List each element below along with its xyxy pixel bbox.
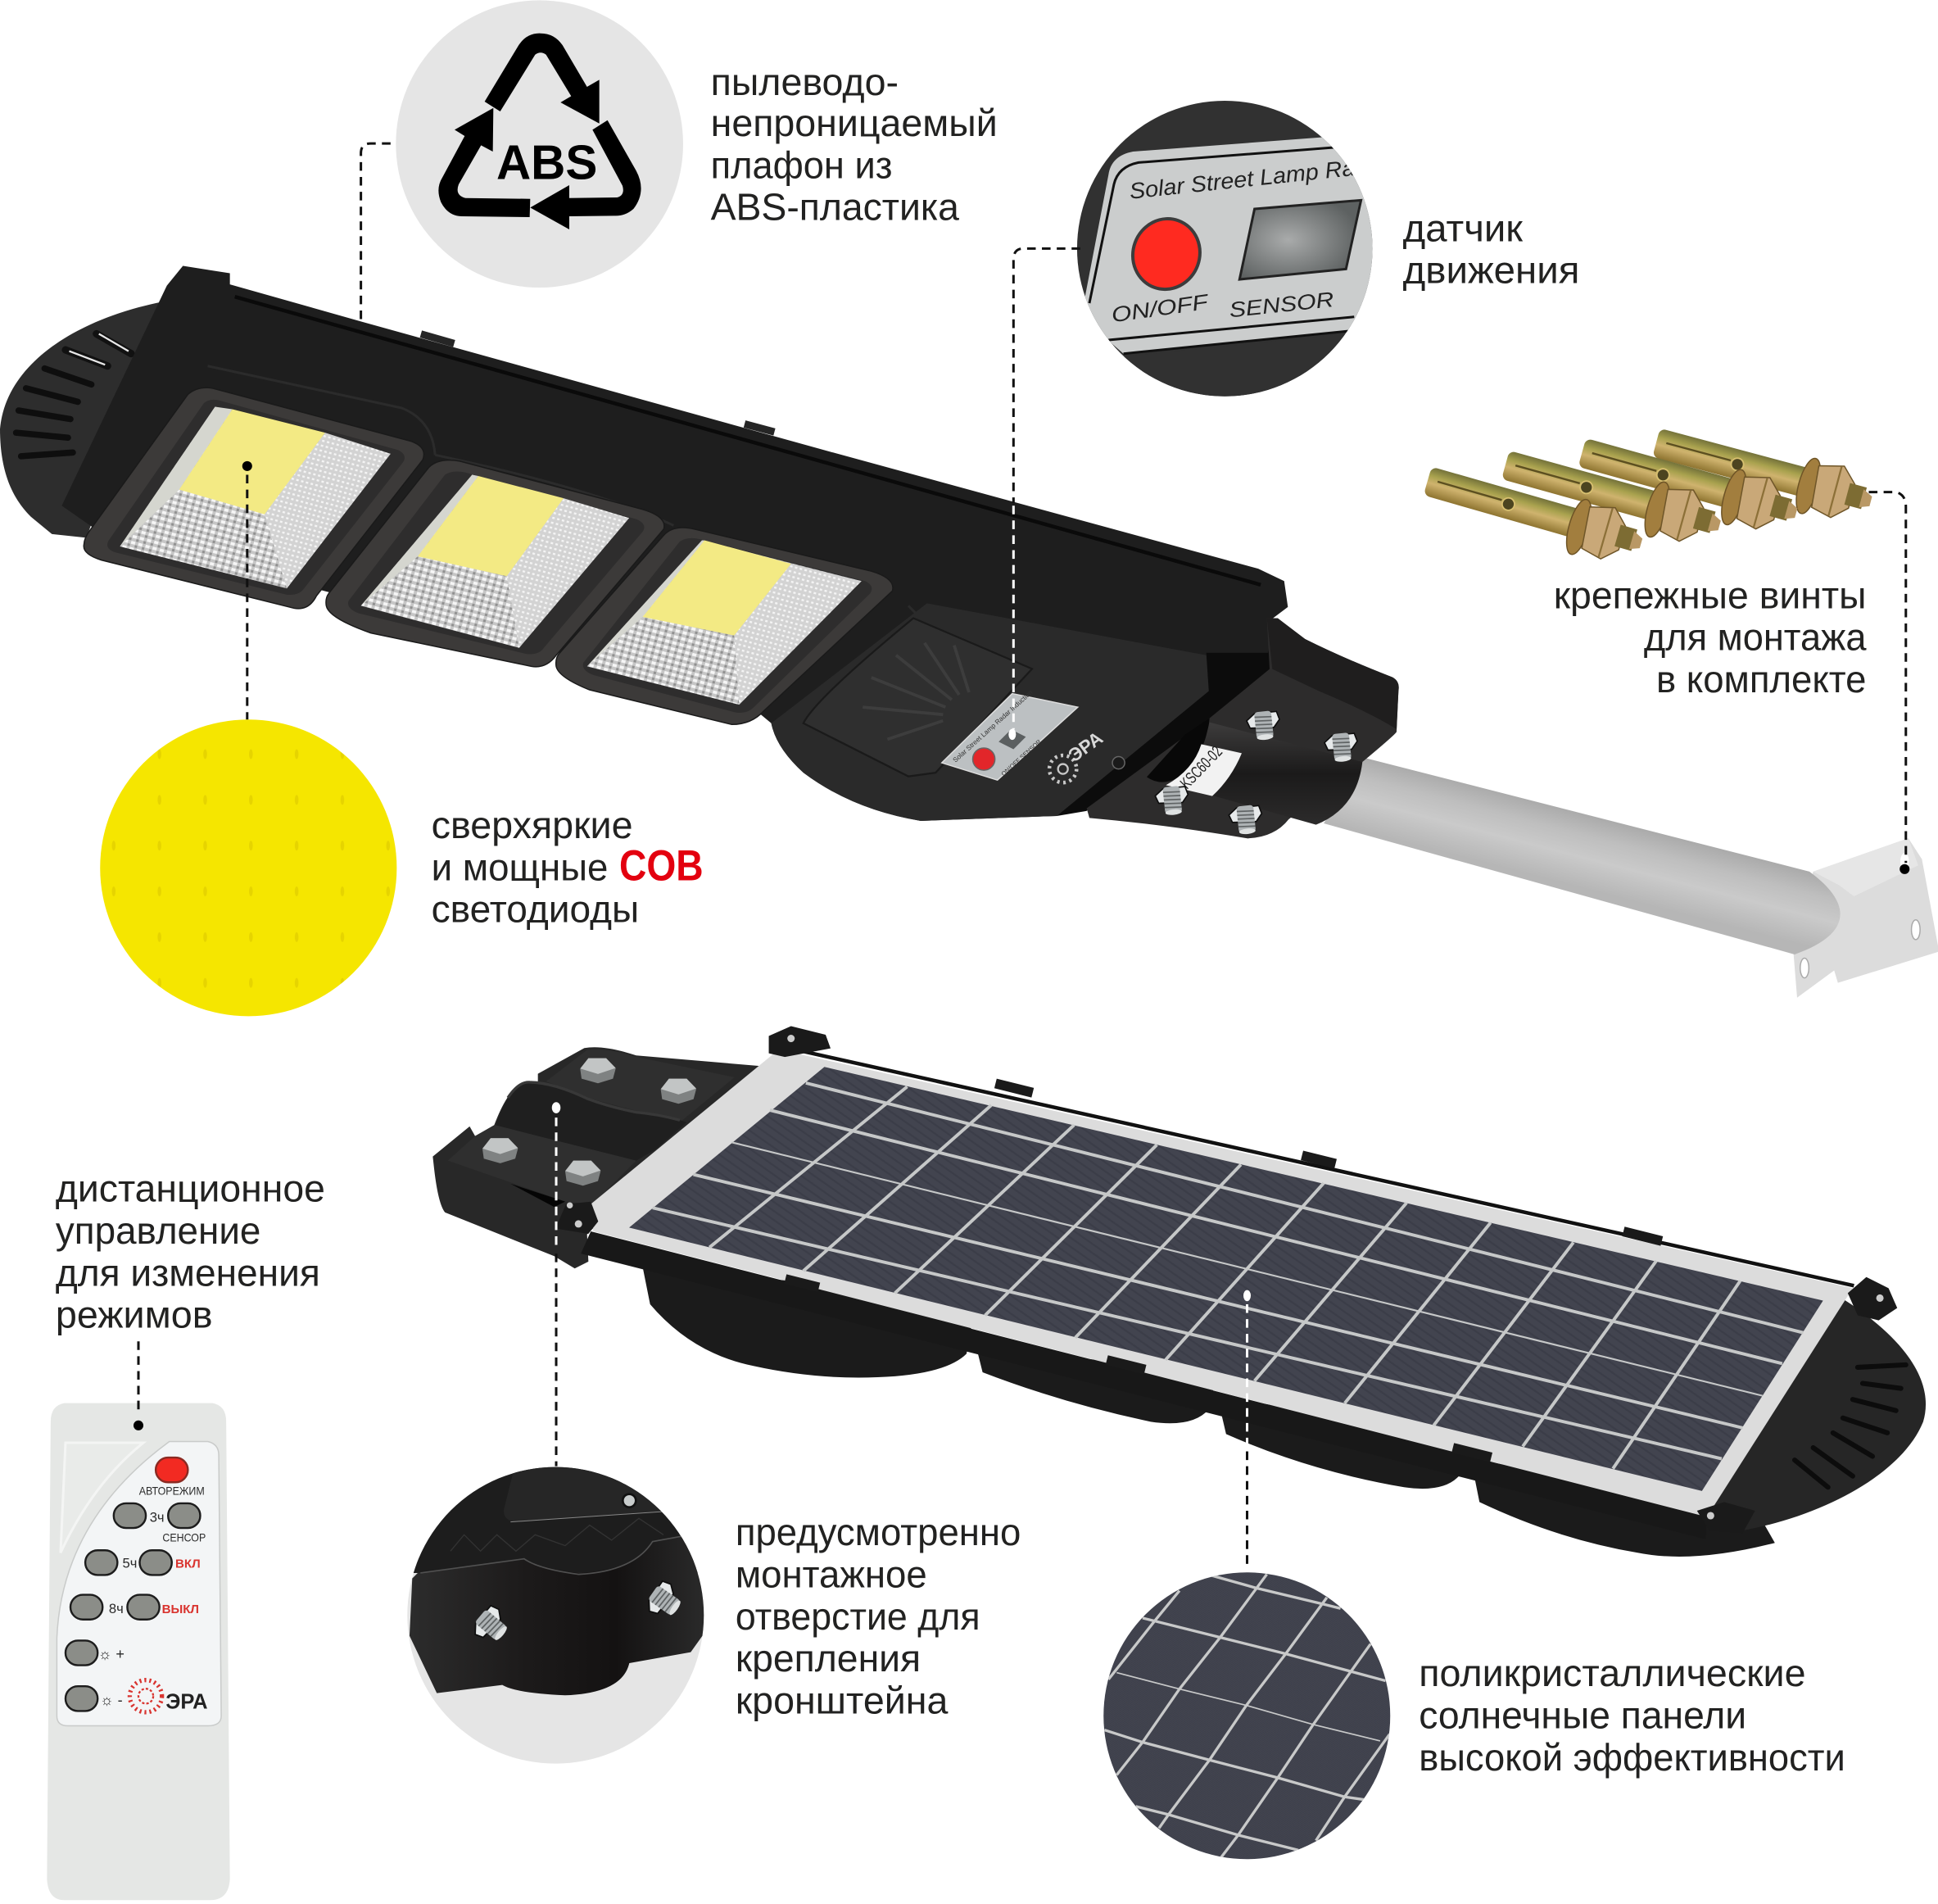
text: COB LEDs: и мощные: [432, 845, 608, 888]
solar panel lamp: [432, 1026, 1926, 1557]
remote labels: ☼ -: [100, 1692, 123, 1708]
housing body: [61, 265, 1288, 821]
text: motion sensor: движения: [1403, 249, 1579, 292]
stud 2: [1324, 732, 1359, 764]
hex bolt 2: [661, 1079, 696, 1104]
left end cap with vents: [0, 301, 170, 537]
bolt 1: [1419, 456, 1649, 572]
brand logo on lamp: ЭРА: [1065, 728, 1107, 766]
remote labels: СЕНСОР: [162, 1532, 206, 1544]
brand logo on lamp: [1049, 728, 1125, 782]
remote labels: АВТОРЕЖИМ: [139, 1485, 205, 1497]
support pipe: [1324, 758, 1841, 954]
heading: ABS shade: ABS-пластика: [711, 186, 960, 229]
text: mounting hole: монтажное: [736, 1553, 927, 1596]
text: motion sensor: [1403, 206, 1579, 292]
remote buttons: [66, 1457, 200, 1711]
stud 4: [1228, 804, 1264, 836]
remote control: [47, 1403, 230, 1900]
callout: mounting hole circle: [401, 1458, 713, 1764]
text: remote control: режимов: [56, 1294, 213, 1336]
hump: [496, 1081, 686, 1161]
text: mounting screws: крепежные винты: [1554, 573, 1866, 616]
hex bolt 1: [580, 1059, 616, 1083]
remote labels: [98, 1485, 206, 1708]
remote labels: 3ч: [150, 1510, 165, 1525]
clamp cylinder: [1204, 723, 1362, 825]
remote labels: ☼ +: [98, 1646, 125, 1662]
text: COB LEDs: [432, 804, 704, 931]
clamp hole: [1147, 719, 1210, 782]
text: polycrystalline panels: [1419, 1652, 1845, 1779]
lamp front view: [0, 265, 1288, 821]
bolt 3: [1573, 428, 1804, 542]
text: remote control: [56, 1167, 325, 1336]
icon: recycling arrows: [438, 34, 641, 229]
hex bolt 3: [482, 1138, 518, 1163]
text: polycrystalline panels: поликристаллические: [1419, 1652, 1806, 1694]
sticker: [1166, 744, 1242, 796]
small screw: [623, 1494, 636, 1507]
sensor window: [1239, 200, 1361, 279]
callout: sensor circle: [1077, 101, 1373, 397]
text: COB LEDs: светодиоды: [432, 888, 639, 931]
text: polycrystalline panels: высокой эффективности: [1419, 1736, 1845, 1779]
heading: ABS shade: [711, 61, 998, 229]
panel captions: ON/OFF: [1110, 289, 1211, 327]
text: mounting hole: [736, 1511, 1021, 1721]
text: remote control: дистанционное: [56, 1167, 325, 1210]
panel captions: SENSOR: [1228, 287, 1335, 322]
bracket plate: [1087, 619, 1399, 838]
text: mounting screws: в комплекте: [1656, 658, 1866, 700]
remote labels: 8ч: [109, 1601, 124, 1616]
corner mounts and clips: [558, 1026, 1897, 1533]
bolts set: [1419, 418, 1878, 572]
bolt 2: [1497, 440, 1727, 554]
lens 3: [556, 528, 893, 724]
panel frame: [581, 1046, 1854, 1539]
lens 1: [84, 388, 423, 609]
silver sensor label: Solar Street Lamp Radar Induction: [951, 688, 1035, 764]
housing rim and recesses: [208, 297, 1261, 821]
mounting bracket with clamp: [1087, 619, 1399, 838]
leader lines: [134, 143, 1909, 1570]
text: remote control: управление: [56, 1209, 260, 1252]
threaded bolt left: [474, 1605, 507, 1640]
text: remote control: для изменения: [56, 1251, 320, 1294]
callout: COB yellow circle: [100, 719, 396, 1016]
heading: ABS shade: плафон из: [711, 143, 892, 186]
right end cap with vents: [1707, 1298, 1926, 1530]
remote labels: ВКЛ: [175, 1557, 201, 1571]
sensor inset with sun rays: [804, 619, 1032, 777]
text: mounting screws: для монтажа: [1644, 616, 1867, 659]
text: mounting hole: крепления: [736, 1637, 921, 1680]
brand name: ЭРА: [165, 1690, 208, 1713]
bracket lattice: [1057, 639, 1273, 816]
mounting bracket with clamp: KSC60-02: [1177, 743, 1226, 792]
text: mounting hole: отверстие для: [736, 1595, 980, 1638]
hex bolt 4: [565, 1161, 600, 1185]
bolt 4: [1648, 418, 1878, 530]
text: mounting hole: кронштейна: [736, 1679, 949, 1721]
remote labels: 5ч: [123, 1555, 137, 1571]
ABS mark: ABS: [496, 134, 597, 189]
threaded bolt right: [649, 1580, 681, 1616]
solar cells grid: [629, 1067, 1823, 1491]
text: COB LEDs: COB: [619, 841, 704, 890]
icon: brand sun: [129, 1680, 162, 1712]
text: COB LEDs: сверхяркие: [432, 804, 633, 846]
text: mounting hole: предусмотренно: [736, 1511, 1021, 1553]
mount bracket with bolts: [432, 1047, 764, 1268]
text: mounting screws: [1554, 573, 1867, 700]
silver sensor label: [942, 688, 1078, 780]
stud 1: [1246, 709, 1281, 741]
callout: ABS circle: [396, 0, 683, 288]
text: motion sensor: датчик: [1403, 206, 1524, 249]
panel captions: [1110, 155, 1356, 327]
remote labels: ВЫКЛ: [162, 1603, 199, 1616]
panel captions: Solar Street Lamp Ra: [1128, 155, 1356, 204]
stud 3: [1154, 785, 1190, 817]
rear housing bumps: [643, 1267, 1775, 1557]
heading: ABS shade: непроницаемый: [711, 102, 998, 144]
text: polycrystalline panels: солнечные панели: [1419, 1694, 1746, 1737]
wall plate: [1793, 838, 1938, 998]
remote keypad panel: [57, 1441, 221, 1726]
heading: ABS shade: пылеводо-: [711, 61, 899, 103]
lens 2: [326, 460, 664, 667]
callout: solar cell circle: [1103, 1572, 1391, 1860]
silver sensor label: ON/OFF SENSOR: [1000, 737, 1043, 777]
button: [1130, 217, 1202, 292]
